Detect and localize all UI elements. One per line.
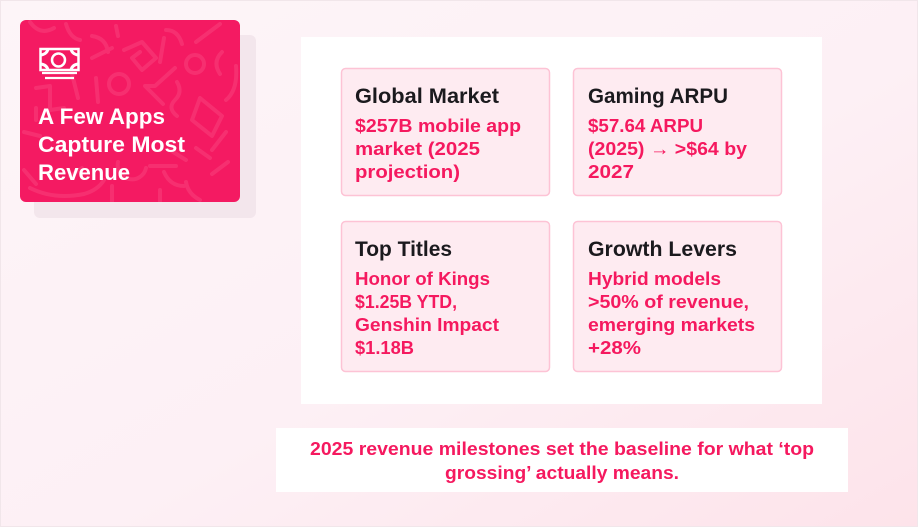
panel: title card shadow [34,35,256,218]
callout: caption: 2025 revenue milestones set the baseline for what ‘top [310,438,814,459]
panel: Top Titles: Honor of Kings [355,268,490,289]
panel: Growth Levers: emerging markets [588,314,755,335]
panel: Global Market: $257B mobile app [355,115,521,136]
panel: Gaming ARPU: 2027 [588,161,634,182]
title: A Few Apps [38,104,165,129]
panel: white content area [301,37,822,404]
panel: Top Titles: $1.25B YTD, [355,291,457,312]
panel: Top Titles: Genshin Impact [355,314,499,335]
panel: Gaming ARPU: Gaming ARPU [588,85,728,108]
panel: Top Titles: $1.18B [355,337,414,358]
title: Revenue [38,160,130,185]
title: Capture Most [38,132,186,157]
panel: Growth Levers [574,222,782,372]
title [38,104,186,185]
panel: Growth Levers: +28% [588,337,641,358]
panel: Growth Levers: Hybrid models [588,268,721,289]
panel: Top Titles [342,222,550,372]
callout: caption [276,428,848,492]
panel: Global Market: Global Market [355,85,499,108]
panel: Growth Levers: >50% of revenue, [588,291,749,312]
panel: Gaming ARPU: (2025) → >$64 by [588,138,748,159]
panel: Global Market: market (2025 [355,138,480,159]
panel: title card [20,20,240,204]
callout: caption: grossing’ actually means. [445,462,679,483]
panel: Gaming ARPU [574,68,782,196]
panel: Growth Levers: Growth Levers [588,238,737,261]
icon: banknotes [40,49,78,78]
panel: Top Titles: Top Titles [355,238,452,261]
panel: Global Market [342,68,550,196]
panel: Global Market: projection) [355,161,460,182]
panel: Gaming ARPU: $57.64 ARPU [588,115,703,136]
